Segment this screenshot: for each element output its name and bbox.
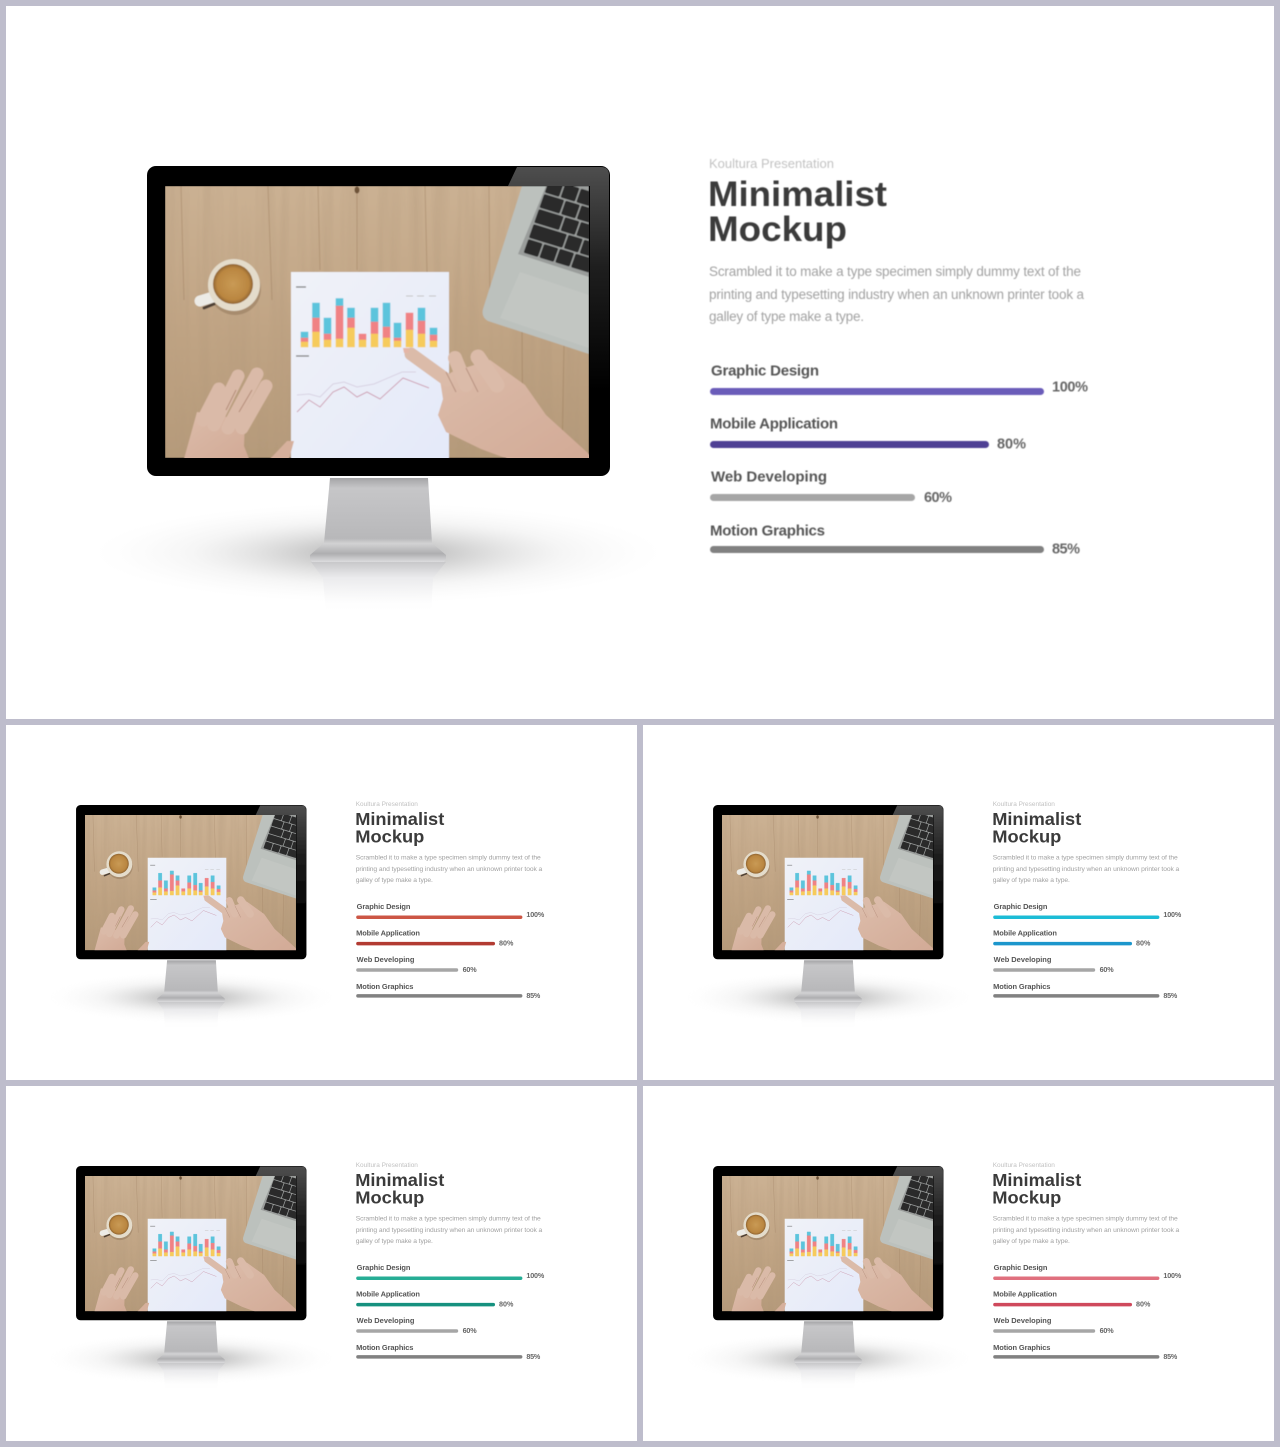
title blue — [992, 809, 1081, 846]
monitor mockup red — [49, 805, 333, 1028]
skill: Web Developing: Web Developing — [711, 468, 827, 486]
title green: Mockup — [355, 1187, 425, 1207]
monitor mockup blue — [686, 805, 970, 1028]
title pink — [992, 1170, 1081, 1207]
skill: Motion Graphics — [710, 522, 1080, 558]
title red: Mockup — [355, 826, 425, 846]
monitor mockup pink — [686, 1166, 970, 1389]
skill bars green: 85% — [526, 1352, 541, 1361]
description green: printing and typesetting industry when an unknown printer took a — [356, 1227, 543, 1234]
skill bars green: Motion Graphics — [356, 1343, 413, 1352]
laptop — [483, 179, 631, 354]
skill: Motion Graphics: Motion Graphics — [710, 522, 825, 540]
skill bars blue: Web Developing — [994, 955, 1052, 964]
skill bars pink: Web Developing — [994, 1316, 1052, 1325]
skill: Graphic Design: 100% — [1052, 380, 1088, 396]
monitor mockup green — [49, 1166, 333, 1389]
skill: Graphic Design: Graphic Design — [711, 362, 819, 380]
skill bars blue: 60% — [1100, 965, 1114, 974]
skill bars blue: Mobile Application — [993, 929, 1057, 938]
eyebrow blue: Koultura Presentation — [993, 801, 1055, 808]
eyebrow red: Koultura Presentation — [356, 801, 418, 808]
bezel glare — [508, 167, 609, 390]
skill bars blue: 80% — [1136, 939, 1151, 948]
description: Scrambled it to make a type specimen simply dummy text of the — [709, 264, 1081, 279]
skill bars blue — [993, 902, 1182, 1000]
description blue: Scrambled it to make a type specimen simply dummy text of the — [993, 855, 1178, 862]
left hand — [184, 374, 294, 459]
skill bars red: 85% — [526, 991, 541, 1000]
skill bars red: Motion Graphics — [356, 982, 413, 991]
skill bars green: 100% — [526, 1271, 545, 1280]
stacked bar chart — [301, 298, 437, 347]
description pink: Scrambled it to make a type specimen simply dummy text of the — [993, 1216, 1178, 1223]
title: Minimalist — [708, 174, 887, 214]
title blue: Minimalist — [992, 809, 1081, 829]
description red: Scrambled it to make a type specimen simply dummy text of the — [356, 855, 541, 862]
title red — [355, 809, 444, 846]
description red: printing and typesetting industry when an unknown printer took a — [356, 866, 543, 873]
skill bars green — [356, 1263, 545, 1361]
title line two: Mockup — [708, 209, 847, 249]
eyebrow: Koultura Presentation — [709, 156, 834, 171]
monitor mockup — [93, 166, 663, 614]
description pink: galley of type make a type. — [993, 1238, 1070, 1245]
skill: Motion Graphics: 85% — [1052, 542, 1080, 558]
skill bars red — [356, 902, 545, 1000]
skill bars red: Graphic Design — [357, 902, 411, 911]
skill bars pink: Graphic Design — [994, 1263, 1048, 1272]
skill: Graphic Design — [710, 362, 1088, 396]
skill bars blue: Graphic Design — [994, 902, 1048, 911]
line chart — [297, 372, 429, 412]
monitor stand — [310, 478, 446, 562]
right hand — [403, 348, 590, 459]
eyebrow green: Koultura Presentation — [356, 1162, 418, 1169]
skill: Mobile Application: 80% — [997, 436, 1026, 452]
skill bars green: Graphic Design — [357, 1263, 411, 1272]
text block: heading and skills — [708, 156, 1088, 558]
description pink: printing and typesetting industry when an unknown printer took a — [993, 1227, 1180, 1234]
description red: galley of type make a type. — [356, 877, 433, 884]
skill bars pink — [993, 1263, 1182, 1361]
title green: Minimalist — [355, 1170, 444, 1190]
skill bars pink: Mobile Application — [993, 1290, 1057, 1299]
skill bars green: Web Developing — [357, 1316, 415, 1325]
skill bars blue: Motion Graphics — [993, 982, 1050, 991]
skill: Mobile Application — [710, 416, 1026, 452]
title green — [355, 1170, 444, 1207]
skill: Mobile Application: Mobile Application — [710, 416, 838, 432]
monitor bezel — [147, 166, 610, 476]
panel: red variant slide — [6, 725, 637, 1080]
description green: Scrambled it to make a type specimen simply dummy text of the — [356, 1216, 541, 1223]
skill bars blue: 100% — [1163, 910, 1182, 919]
floor shadow — [93, 503, 663, 603]
skill bars green: Mobile Application — [356, 1290, 420, 1299]
panel: main slide — [6, 6, 1274, 719]
title red: Minimalist — [355, 809, 444, 829]
eyebrow pink: Koultura Presentation — [993, 1162, 1055, 1169]
title pink: Minimalist — [992, 1170, 1081, 1190]
skill: Web Developing — [710, 468, 952, 506]
description blue — [993, 855, 1180, 884]
description — [709, 264, 1084, 324]
skill bars green: 60% — [463, 1326, 477, 1335]
description green — [356, 1216, 543, 1245]
description blue: galley of type make a type. — [993, 877, 1070, 884]
skill: Web Developing: 60% — [924, 490, 952, 506]
skill bars red: 60% — [463, 965, 477, 974]
report paper — [291, 272, 449, 462]
skill bars red: 100% — [526, 910, 545, 919]
skill bars red: 80% — [499, 939, 514, 948]
description red — [356, 855, 543, 884]
stand reflection — [311, 562, 446, 614]
title blue: Mockup — [992, 826, 1062, 846]
description: printing and typesetting industry when an unknown printer took a — [709, 287, 1084, 302]
description blue: printing and typesetting industry when an unknown printer took a — [993, 866, 1180, 873]
skill bars pink: 100% — [1163, 1271, 1182, 1280]
skill bars red: Mobile Application — [356, 929, 420, 938]
skill bars pink: 80% — [1136, 1300, 1151, 1309]
panel: blue variant slide — [643, 725, 1274, 1080]
description green: galley of type make a type. — [356, 1238, 433, 1245]
description: galley of type make a type. — [709, 309, 864, 324]
skill bars blue: 85% — [1163, 991, 1178, 1000]
panel: green variant slide — [6, 1086, 637, 1441]
skill bars pink: Motion Graphics — [993, 1343, 1050, 1352]
skill bars red: Web Developing — [357, 955, 415, 964]
description pink — [993, 1216, 1180, 1245]
screen photo — [165, 179, 631, 462]
panel: pink variant slide — [643, 1086, 1274, 1441]
title pink: Mockup — [992, 1187, 1062, 1207]
skill bars pink: 60% — [1100, 1326, 1114, 1335]
wooden desk — [165, 186, 589, 458]
coffee cup — [200, 259, 261, 315]
skill bars green: 80% — [499, 1300, 514, 1309]
skill bars pink: 85% — [1163, 1352, 1178, 1361]
